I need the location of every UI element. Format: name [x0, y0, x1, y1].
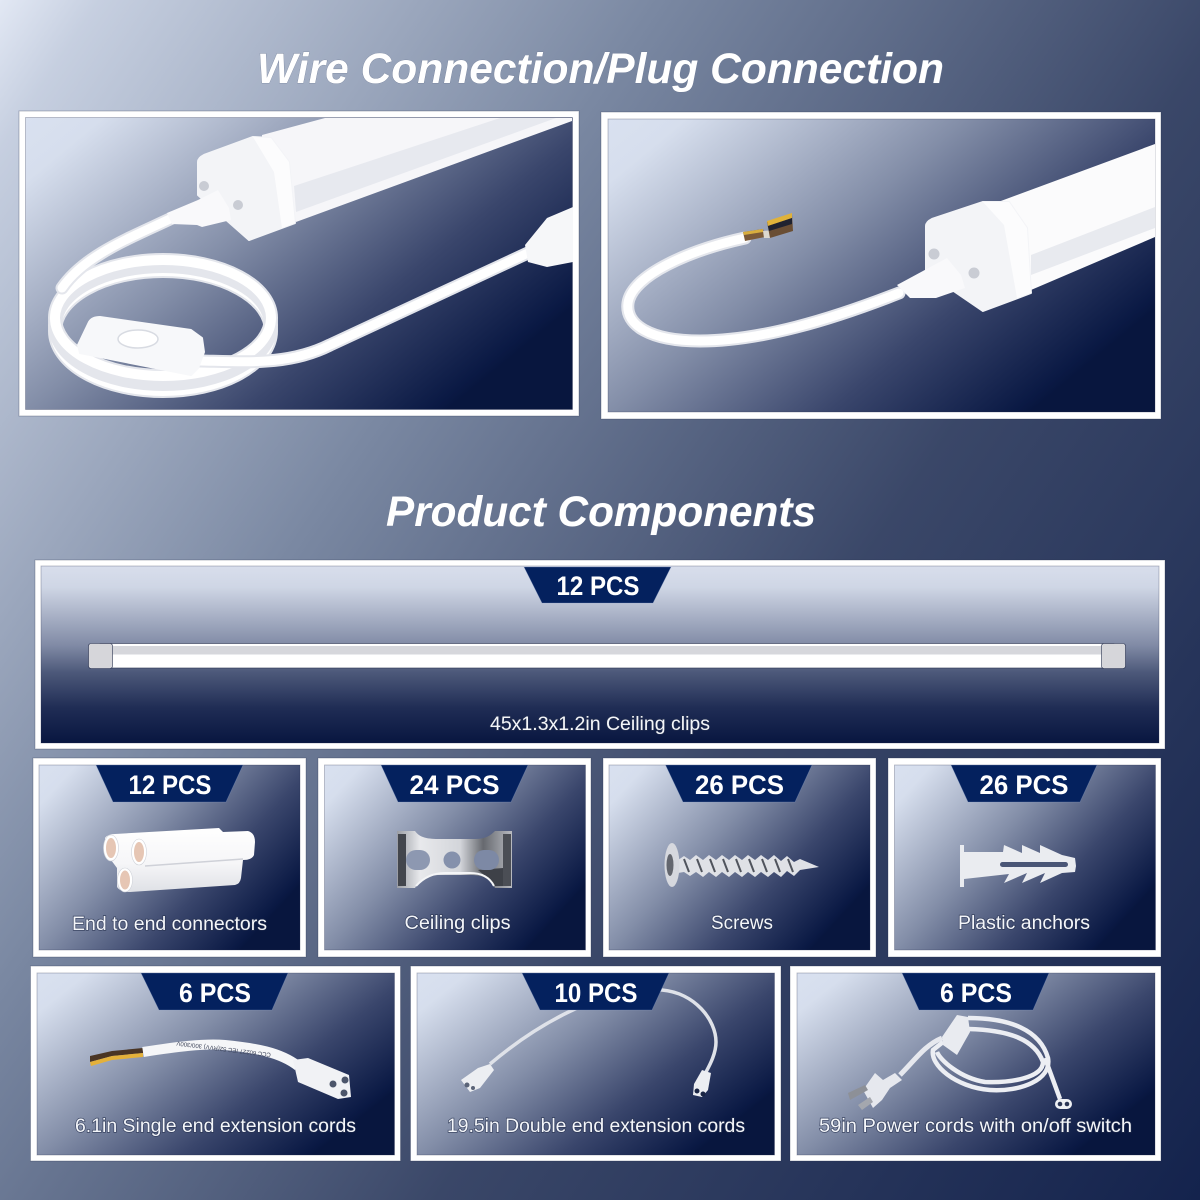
badge: 12 pcs [524, 567, 671, 603]
badge: 24 pcs [381, 765, 528, 802]
cable with stripped wires [628, 213, 965, 341]
icon: power cord with switch [848, 1015, 1072, 1110]
icon: plastic anchor [960, 845, 1076, 887]
full length light tube [88, 644, 1126, 668]
panel: ceiling clips [318, 758, 591, 957]
panel: single end extension cords [30, 966, 400, 1161]
panel: power cords [790, 966, 1161, 1161]
caption: Ceiling clips [404, 913, 510, 934]
badge: 12 pcs: 12 PCS [128, 770, 212, 800]
panel: double end extension cords [410, 966, 781, 1161]
badge: 10 pcs: 10 PCS [554, 978, 638, 1008]
badge: 26 pcs [951, 765, 1097, 802]
coiled cable with switch [55, 190, 530, 391]
end cap [926, 202, 1031, 311]
badge: 12 pcs [96, 765, 243, 802]
icon: single end cord: CCC 60227 IEC 52(RVV) 300/300V [176, 1039, 271, 1057]
badge: 26 pcs: 26 PCS [980, 770, 1068, 800]
badge: 6 pcs [141, 973, 288, 1010]
panel: screws [603, 758, 876, 957]
panel: light tube 12 pcs [35, 560, 1165, 749]
in-line connector [525, 207, 573, 267]
caption: 45x1.3x1.2in Ceiling clips [490, 714, 710, 735]
icon: single end cord [90, 1039, 351, 1099]
caption: Screws [711, 913, 773, 934]
badge: 12 pcs: 12 PCS [556, 571, 640, 601]
icon: screw [664, 843, 819, 887]
caption: 19.5in Double end extension cords [447, 1116, 745, 1137]
badge: 26 pcs: 26 PCS [695, 770, 784, 800]
badge: 24 pcs: 24 PCS [410, 770, 500, 800]
panel: end to end connectors [33, 758, 306, 957]
light tube [990, 144, 1155, 290]
badge: 6 pcs: 6 PCS [940, 978, 1012, 1008]
caption: 59in Power cords with on/off switch [819, 1116, 1132, 1137]
light tube [262, 118, 572, 222]
icon: metal clip [397, 831, 512, 888]
heading: product components: Product Components [386, 488, 816, 536]
icon: double end cord [461, 990, 716, 1097]
panel: plug connection photo [19, 111, 579, 416]
badge: 10 pcs [522, 973, 669, 1010]
caption: 6.1in Single end extension cords [75, 1116, 356, 1137]
end cap [198, 137, 295, 240]
badge: 26 pcs [666, 765, 812, 802]
panel: hardwire connection photo [601, 112, 1161, 419]
panel: plastic anchors [888, 758, 1161, 957]
badge: 6 pcs [902, 973, 1049, 1010]
icon: triple connector [104, 828, 255, 892]
caption: End to end connectors [72, 914, 267, 935]
title: wire connection: Wire Connection/Plug Connection [257, 45, 944, 93]
badge: 6 pcs: 6 PCS [179, 978, 251, 1008]
caption: Plastic anchors [958, 913, 1090, 934]
